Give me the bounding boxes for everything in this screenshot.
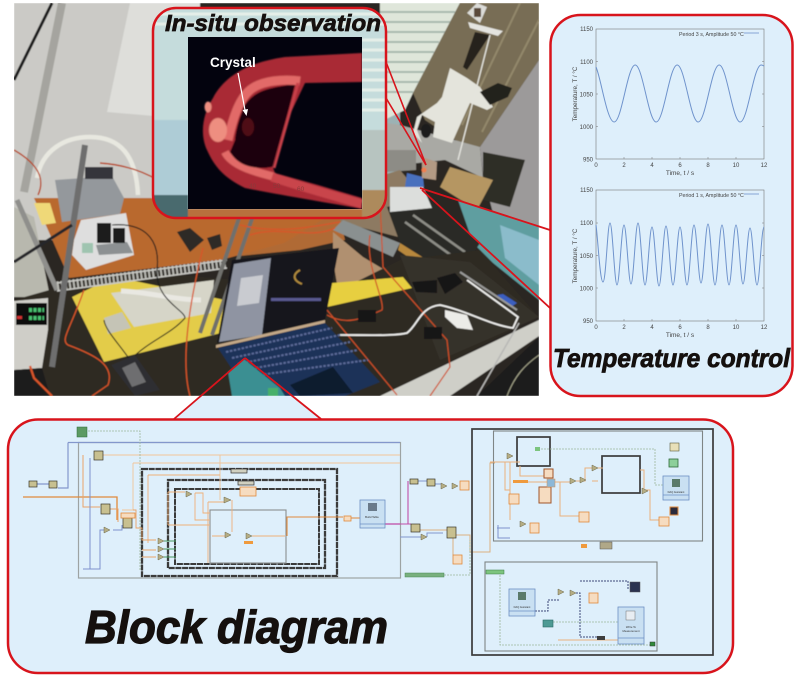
chart: period 3 s: 1000 (580, 125, 594, 131)
chart: period 1 s: Temperature, T / °C (571, 228, 579, 283)
block: DAQ Assistant (663, 476, 689, 500)
block: file writer (360, 500, 385, 528)
chart: period 3 s: 1100 (580, 60, 594, 66)
diagram: main acquisition loop (23, 427, 400, 578)
chart: period 1 s: 8 (706, 325, 710, 331)
chart: period 1 s: 10 (733, 325, 740, 331)
block: Write To Measurement File: Write To (626, 625, 637, 629)
chart: period 1 s: Period 1 s, Amplitude 50 °C (679, 193, 744, 199)
chart: period 1 s: 12 (761, 325, 768, 331)
photo: experimental setup (14, 3, 539, 396)
chart: period 3 s: 8 (706, 163, 710, 169)
block: DAQ Assistant: DAQ Assistant (668, 490, 685, 494)
chart: period 3 s: 10 (733, 163, 740, 169)
scale numbers on micrograph: 60 (297, 186, 305, 193)
chart: period 1 s: 1150 (580, 188, 594, 194)
chart: period 1 s: 2 (622, 325, 626, 331)
chart: period 1 s: 0 (594, 325, 598, 331)
connector lines: inset to sample (386, 62, 426, 165)
chart: period 1 s: 1050 (580, 254, 594, 260)
chart: period 3 s: 950 (583, 158, 594, 164)
heading: Block diagram: Block diagram (85, 601, 388, 653)
chart: period 3 s: Temperature, T / °C (571, 66, 579, 121)
chart: period 1 s: Time, t / s (666, 332, 695, 339)
inset: in-situ observation panel (153, 8, 386, 218)
heading: In-situ observation: In-situ observation (165, 10, 381, 36)
label: Crystal: Crystal (210, 55, 256, 70)
diagram: right frames (472, 429, 713, 655)
panel: temperature control (550, 15, 792, 396)
chart: period 3 s: Time, t / s (666, 170, 695, 177)
chart: period 3 s: 0 (594, 163, 598, 169)
chart: period 3 s: 6 (678, 163, 682, 169)
chart: period 3 s: 12 (761, 163, 768, 169)
chart: period 3 s (571, 27, 768, 177)
connector lines: sample to temperature control (420, 188, 550, 308)
chart: period 3 s: 4 (650, 163, 654, 169)
heading: Temperature control: Temperature control (553, 343, 791, 373)
chart: period 1 s: 6 (678, 325, 682, 331)
chart: period 1 s: 1000 (580, 286, 594, 292)
callout wedge: laptop to block diagram (174, 358, 321, 420)
chart: period 3 s: 2 (622, 163, 626, 169)
chart: period 1 s (571, 188, 768, 339)
block: DAQ Assistant 2: DAQ Assistant (514, 605, 531, 609)
scale numbers on micrograph: 40 (249, 183, 257, 190)
micrograph: crystal in thermocouple loop (188, 37, 362, 209)
panel: block diagram (8, 358, 733, 673)
block: Write To Measurement File: Measurement (622, 629, 640, 633)
scale numbers on micrograph (249, 184, 304, 191)
chart: period 3 s: 1150 (580, 27, 594, 33)
block: file writer: Build Table (365, 515, 379, 519)
diagram: middle nodes (400, 463, 495, 577)
arrow: crystal pointer (238, 73, 248, 116)
chart: period 1 s: 1100 (580, 221, 594, 227)
chart: period 3 s: Period 3 s, Amplitude 50 °C (679, 32, 744, 38)
chart: period 1 s: 950 (583, 319, 594, 325)
block: Write To Measurement File (618, 607, 644, 644)
chart: period 3 s: 1050 (580, 92, 594, 98)
block: DAQ Assistant 2 (509, 589, 535, 616)
scale numbers on micrograph: 50 (273, 183, 281, 190)
chart: period 1 s: 4 (650, 325, 654, 331)
